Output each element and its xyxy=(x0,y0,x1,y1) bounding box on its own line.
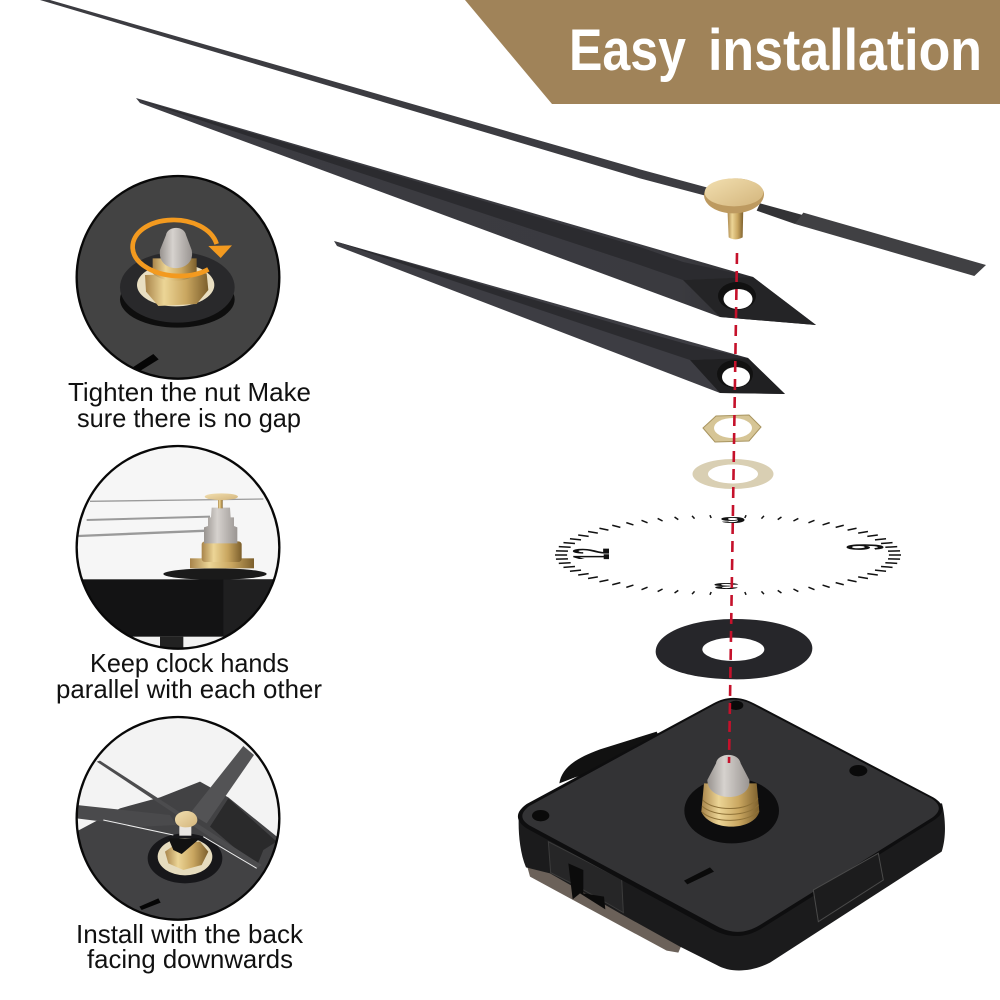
dial markings: 12 xyxy=(562,548,620,560)
hex nut xyxy=(703,415,761,442)
gasket xyxy=(120,294,235,328)
dial markings xyxy=(555,515,901,595)
rim xyxy=(518,698,942,936)
screw holes xyxy=(532,701,867,821)
body side xyxy=(519,803,945,970)
hour hand xyxy=(78,805,118,821)
threaded brass post xyxy=(701,783,759,827)
circular photo: tighten nut xyxy=(76,174,280,380)
red dashed assembly line xyxy=(729,253,737,763)
caption: tighten nut: Tighten the nut Make xyxy=(68,377,311,407)
right clip xyxy=(813,853,883,922)
gasket xyxy=(148,833,222,883)
side clip xyxy=(548,842,623,913)
caption: install facing downwards: facing downwards xyxy=(87,944,293,974)
black gasket xyxy=(163,568,267,580)
gray spindle xyxy=(707,755,749,797)
caption: parallel hands: parallel with each other xyxy=(56,674,322,704)
brass pin xyxy=(218,498,223,508)
minute hand xyxy=(190,746,254,823)
movement face xyxy=(78,782,276,918)
spindle and cap xyxy=(179,825,191,836)
translucent gear housing xyxy=(525,858,682,953)
hanger hook xyxy=(559,732,661,783)
washer xyxy=(692,459,774,489)
hex nut xyxy=(145,273,208,306)
slot xyxy=(139,898,161,910)
hex nut xyxy=(165,842,208,870)
title banner xyxy=(465,0,1000,104)
caption: install facing downwards xyxy=(76,919,304,974)
slot xyxy=(134,354,158,370)
dial markings: 6 xyxy=(836,544,894,550)
dial markings: 3 xyxy=(713,581,739,590)
second hand xyxy=(97,761,262,868)
caption: parallel hands xyxy=(56,648,322,704)
hand slot xyxy=(684,867,714,884)
switch slot xyxy=(568,863,605,909)
flange xyxy=(684,778,779,843)
threaded brass collar xyxy=(202,541,242,562)
front face xyxy=(522,700,939,932)
caption: tighten nut xyxy=(68,377,311,433)
hour hand xyxy=(334,241,785,394)
orange rotation arrow xyxy=(133,220,232,276)
nut xyxy=(190,558,254,568)
spindle xyxy=(204,508,237,543)
hand edges xyxy=(78,499,263,536)
gold washer xyxy=(137,264,214,306)
circular photo: install facing downwards xyxy=(76,716,280,921)
minute hand xyxy=(136,98,816,325)
threaded collar xyxy=(153,258,197,281)
second hand xyxy=(40,0,986,276)
spindle xyxy=(160,228,192,268)
clock movement xyxy=(518,698,945,970)
brass pin xyxy=(704,178,764,239)
caption: parallel hands: Keep clock hands xyxy=(90,648,289,678)
caption: install facing downwards: Install with the back xyxy=(76,919,304,949)
dial markings: 9 xyxy=(720,516,746,525)
circular photo: parallel hands xyxy=(76,444,280,650)
black case xyxy=(83,579,273,637)
caption: tighten nut: sure there is no gap xyxy=(77,403,301,433)
black rubber gasket xyxy=(656,619,812,679)
title banner: Easy xyxy=(569,18,686,83)
